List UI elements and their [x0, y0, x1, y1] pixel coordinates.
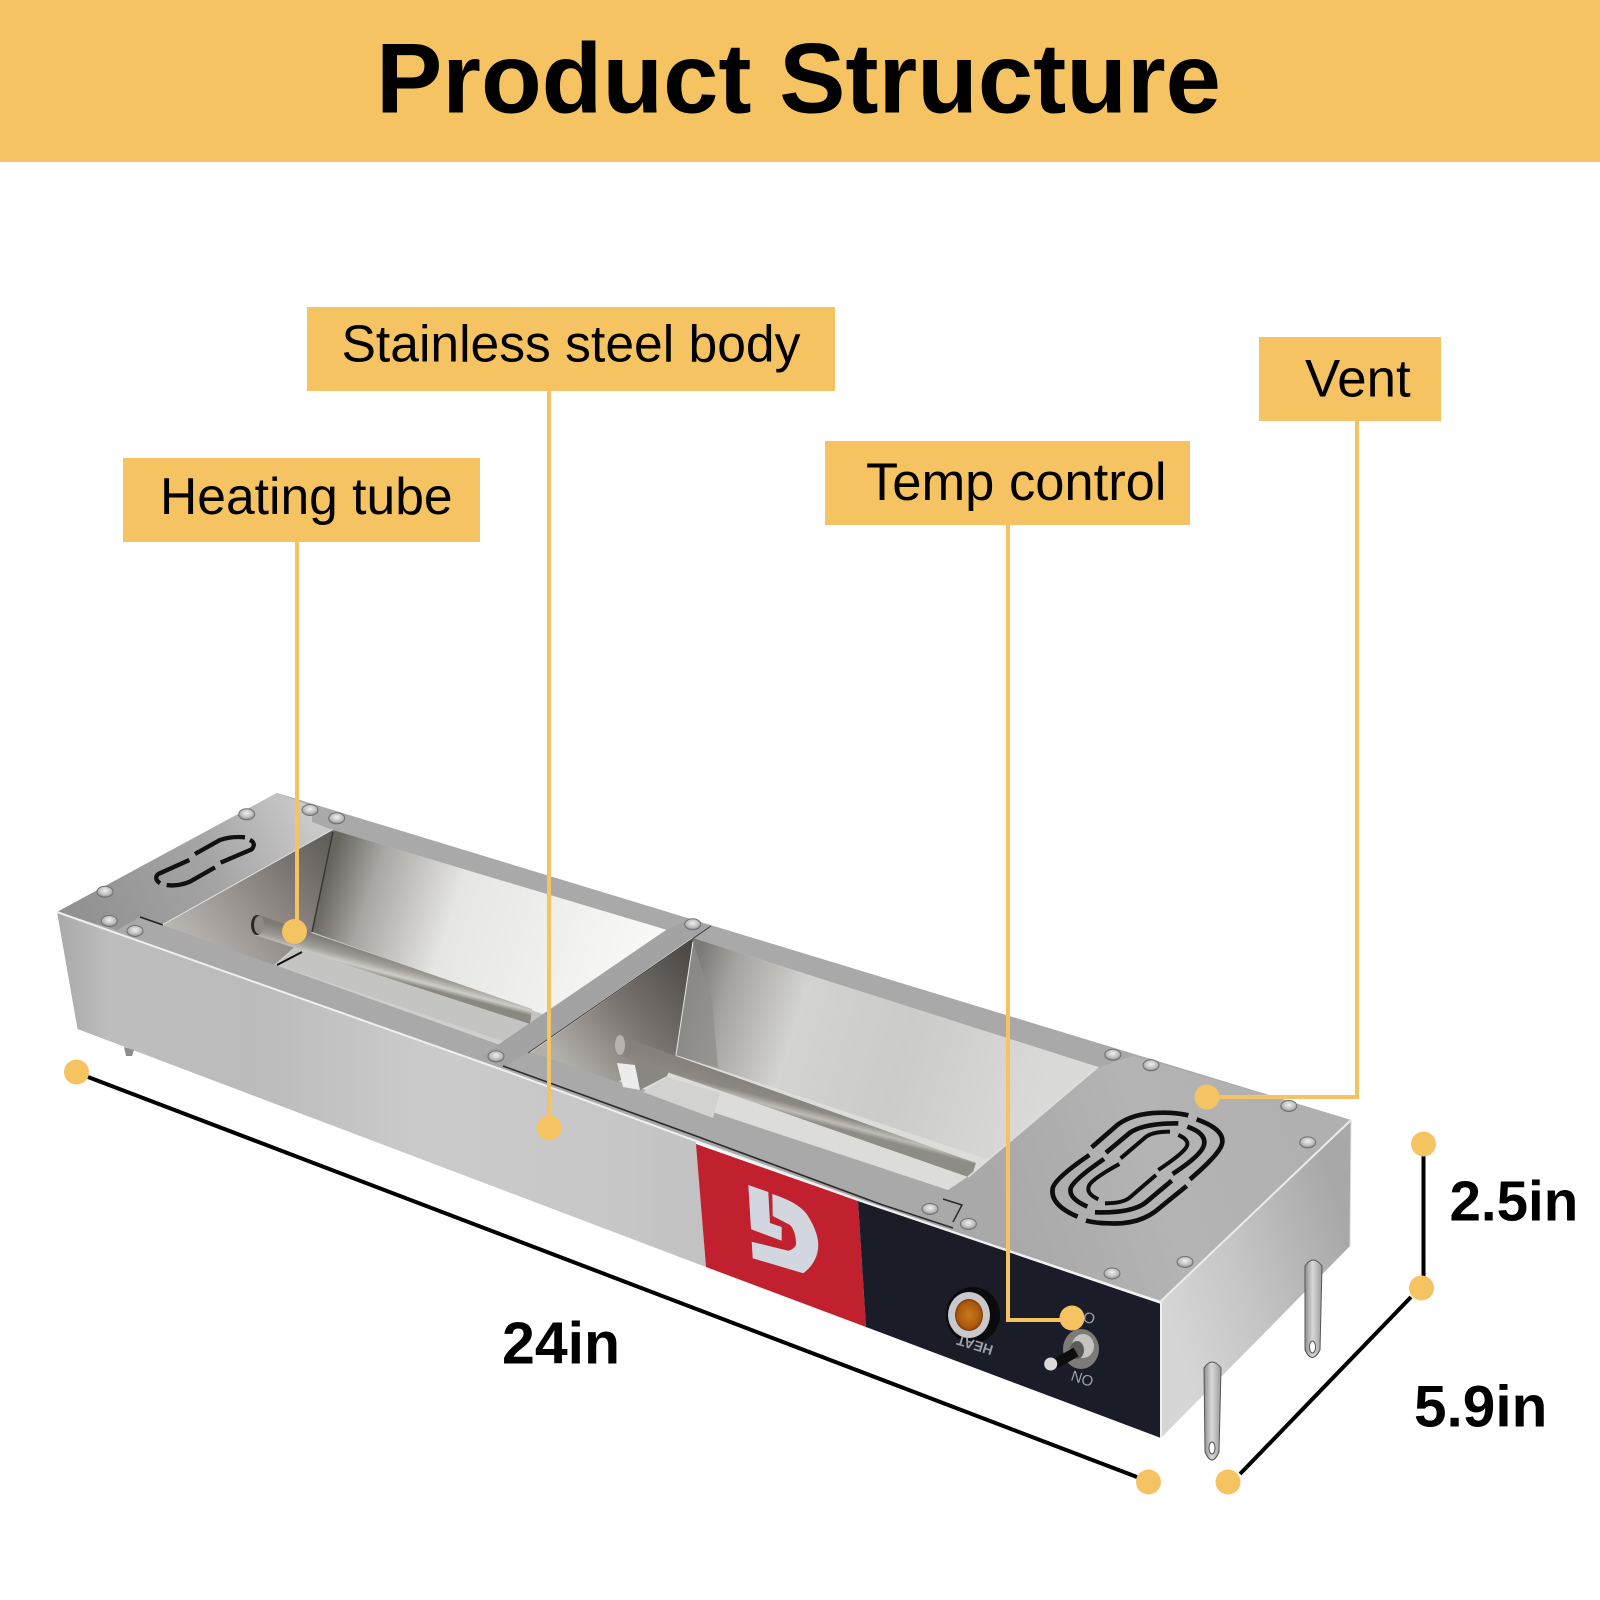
screws [97, 804, 1316, 1279]
product: stainless steel warmer [57, 793, 1351, 1460]
left compartment [163, 830, 667, 1045]
callout: heating tube: Heating tube [160, 467, 453, 525]
black control panel [858, 1201, 1161, 1438]
callout: heating tube [123, 458, 480, 944]
indicator light: HEAT [954, 1332, 995, 1358]
callout: vent: Vent [1305, 349, 1411, 408]
toggle switch: NO [1069, 1368, 1095, 1391]
left end cap [57, 793, 333, 930]
front face [57, 912, 706, 1267]
header banner [0, 0, 1600, 162]
mounting hooks [1204, 1260, 1322, 1460]
right compartment [531, 938, 1098, 1190]
toggle switch [1044, 1309, 1099, 1391]
right end cap [943, 1056, 1351, 1302]
red brand panel [696, 1144, 866, 1327]
heating tube right [615, 1035, 976, 1178]
edge highlights [57, 912, 1351, 1438]
indicator light [946, 1287, 1000, 1358]
dimension: length 24in [64, 1060, 1161, 1494]
dimension: depth 5.9in: 5.9in [1414, 1374, 1547, 1440]
callout: stainless steel body [307, 307, 835, 1140]
heating tube left [251, 915, 532, 1024]
callout: temp control: Temp control [866, 453, 1167, 512]
top plate [57, 793, 1351, 1302]
side face [1161, 1120, 1351, 1438]
title: Product Structure [376, 24, 1221, 134]
dimension: depth 5.9in [1216, 1297, 1547, 1494]
dimension: height 2.5in: 2.5in [1450, 1170, 1578, 1232]
callout: temp control [825, 441, 1190, 1330]
dimension: length 24in: 24in [502, 1310, 620, 1376]
rear foot pin [124, 1047, 134, 1056]
divider brace [482, 921, 711, 1068]
toggle switch: O [1081, 1309, 1097, 1328]
vent slots [1052, 1113, 1222, 1224]
callout: vent [1194, 337, 1441, 1110]
callout: stainless steel body: Stainless steel body [342, 314, 801, 372]
dimension: height 2.5in [1409, 1132, 1578, 1300]
